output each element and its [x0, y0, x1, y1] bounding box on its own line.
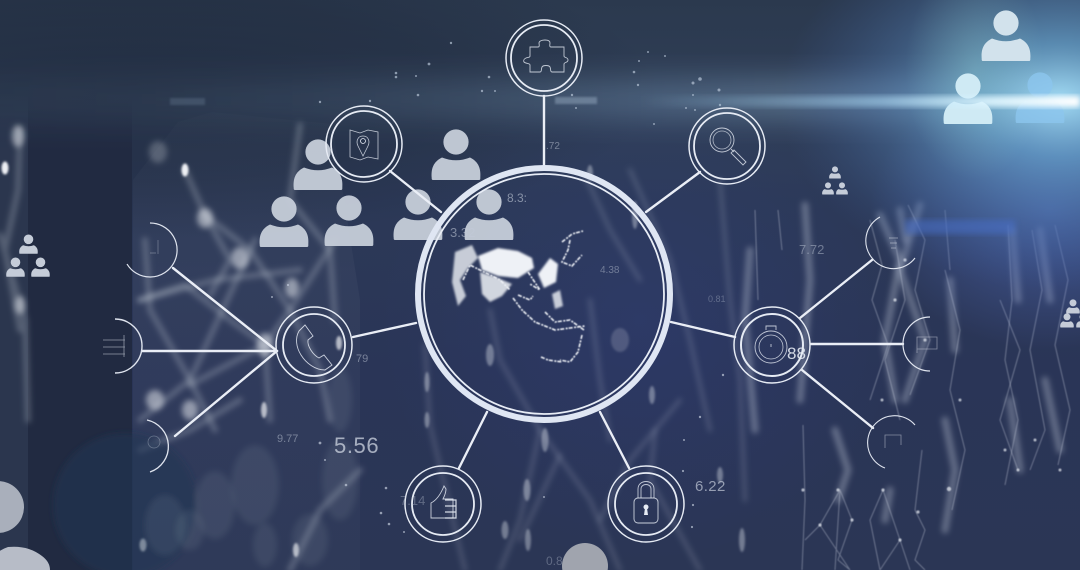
number labels: 7.72: [799, 242, 824, 257]
node: lock: [608, 466, 684, 542]
background: dark left column: [28, 95, 132, 570]
network texture: right streaks sharp: [755, 205, 1070, 570]
number labels: 79: [356, 353, 368, 365]
number labels: .72: [546, 141, 560, 152]
sub-node: lower right: [868, 416, 915, 468]
circle: bottom person head: [562, 543, 608, 570]
background: horizontal light band: [0, 82, 1080, 116]
number labels: 9.77: [277, 433, 298, 445]
number labels: 7.14: [400, 493, 425, 508]
icon: small people trio right: [1060, 299, 1080, 327]
icon: small people trio middle: [822, 166, 848, 194]
central globe: [418, 168, 670, 420]
number labels: 0.81: [708, 294, 726, 304]
number labels: [277, 141, 824, 568]
number labels: 3.32: [450, 225, 475, 240]
bokeh: lower left: [53, 368, 358, 570]
node: magnifier: [689, 108, 765, 184]
number labels: 4.38: [600, 265, 620, 276]
node: phone: [276, 307, 352, 383]
lens flare: left segment: [170, 98, 205, 105]
person: bottom left: [0, 481, 50, 570]
particles: [319, 42, 721, 125]
node: thumbs up: [405, 466, 481, 542]
lens flare: glow: [780, 0, 1080, 290]
lens flare: blue bar: [905, 220, 1015, 234]
number labels: 6.22: [695, 478, 726, 495]
network texture: left panel: [0, 125, 360, 570]
sub-node: upper left: [127, 223, 177, 277]
sub-node: lower left: [147, 420, 168, 472]
number labels: 88: [787, 344, 806, 363]
lens flare: streak: [640, 96, 1080, 107]
map: coastlines and islands: [463, 231, 585, 362]
network bright nodes: left panel: [2, 162, 342, 557]
network nodes: centre: [424, 165, 745, 552]
background: violet glow: [380, 80, 900, 560]
network texture: right streaks blurred: [745, 205, 1060, 530]
lens flare: green cast: [905, 0, 1045, 180]
people group: left: [260, 139, 373, 247]
node: stopwatch: [734, 307, 810, 383]
background: network panel left: [133, 112, 360, 570]
node: map: [326, 106, 402, 182]
background: upper-left darkening: [0, 0, 660, 240]
lens flare: band segment: [555, 97, 597, 104]
number labels: 0.8: [546, 554, 563, 568]
icon: small people trio left: [6, 235, 50, 277]
node: puzzle: [506, 20, 582, 96]
sub-node: middle right: [903, 317, 937, 371]
background: left strip: [0, 95, 28, 570]
connector lines: [142, 96, 903, 468]
sub-node: upper right: [866, 217, 915, 269]
network nodes: right: [801, 258, 1062, 542]
people group: centre: [394, 129, 513, 240]
number labels: 8.3:: [507, 191, 527, 205]
sub-node: middle left: [103, 319, 142, 373]
map: bright landmass: [452, 245, 563, 309]
number labels: 5.56: [334, 433, 379, 458]
particles: lower: [271, 284, 724, 533]
people group: top right: [944, 10, 1064, 124]
network texture: centre: [425, 170, 745, 570]
network nodes: left panel: [12, 125, 299, 420]
lens flare: blue lower glow: [870, 70, 1080, 350]
